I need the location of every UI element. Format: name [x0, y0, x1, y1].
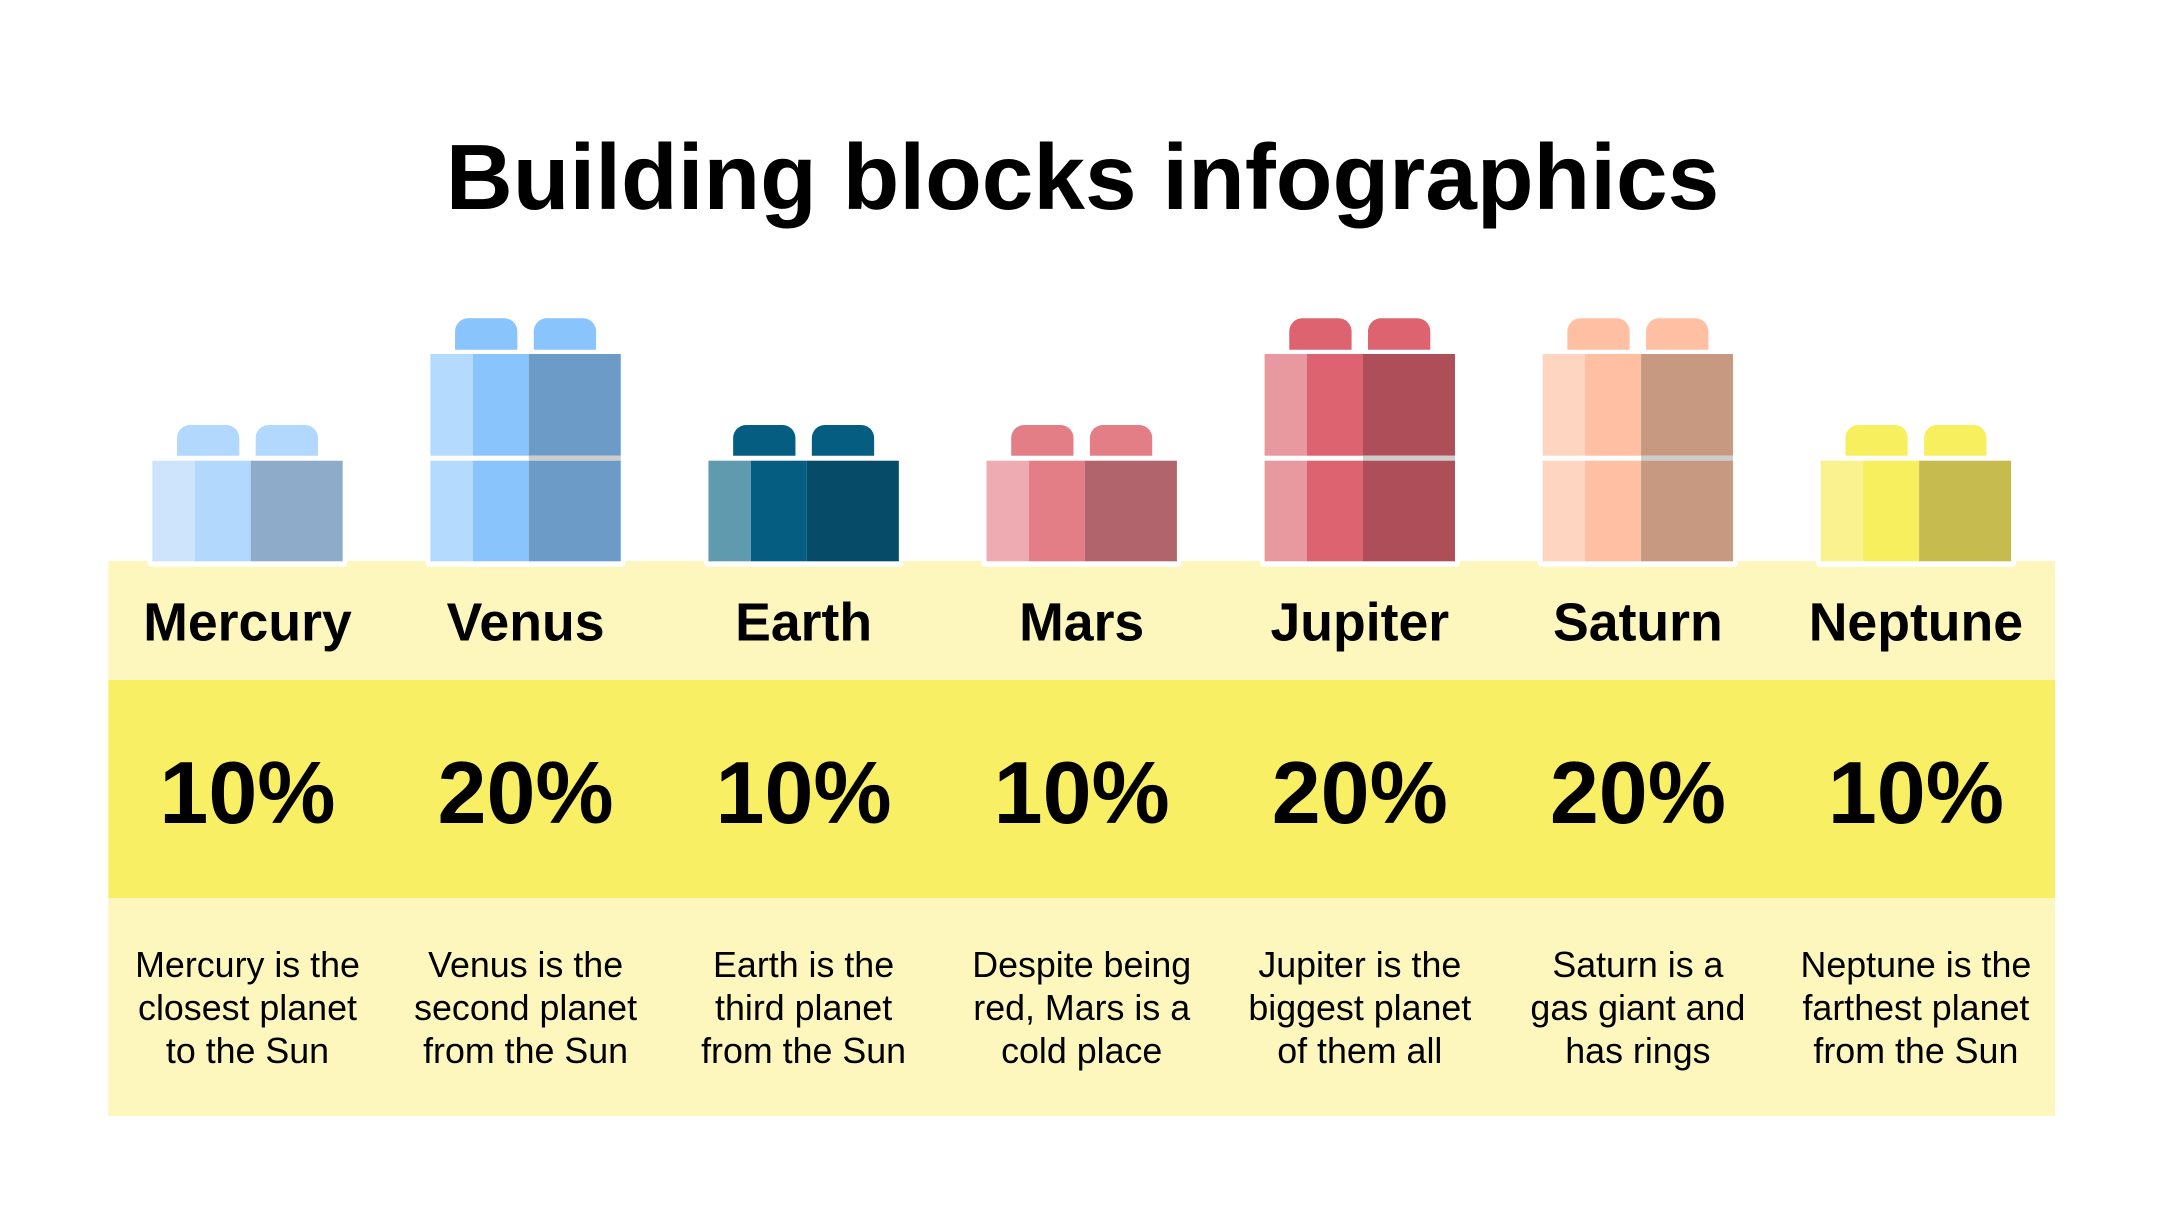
- text: Venus description: from the Sun: [423, 1031, 628, 1071]
- number: Earth 10%: 10%: [716, 743, 892, 842]
- icon: Venus block, two levels: [426, 318, 625, 567]
- text: Neptune description: Neptune is the: [1800, 945, 2031, 985]
- text: Neptune description: from the Sun: [1813, 1031, 2018, 1071]
- text: Venus description: second planet: [414, 988, 637, 1028]
- number: Mercury 10%: 10%: [159, 743, 336, 842]
- text: Saturn description: has rings: [1565, 1031, 1711, 1071]
- text: Jupiter description: of them all: [1277, 1031, 1442, 1071]
- text: Saturn description: gas giant and: [1530, 988, 1745, 1028]
- heading: Mercury: Mercury: [143, 593, 352, 653]
- text: Earth description: Earth is the: [713, 945, 894, 985]
- descriptions: [135, 945, 2031, 1071]
- icon: Mars block, one level: [982, 425, 1182, 567]
- number: Venus 20%: 20%: [438, 743, 614, 842]
- icon: Earth block, one level: [704, 425, 904, 567]
- text: Saturn description: Saturn is a: [1552, 945, 1724, 985]
- icon: Saturn block, two levels: [1538, 318, 1738, 567]
- icon: Neptune block, one level: [1816, 425, 2016, 567]
- text: Mercury description: to the Sun: [166, 1031, 329, 1071]
- planet names: [143, 593, 2023, 653]
- panel: descriptions band: [108, 898, 2055, 1116]
- title: Building blocks infographics: [446, 125, 1719, 229]
- text: Earth description: third planet: [715, 988, 892, 1028]
- heading: Mars: Mars: [1019, 593, 1144, 653]
- panel: names band: [108, 561, 2055, 680]
- heading: Venus: Venus: [447, 593, 605, 653]
- text: Mars description: cold place: [1001, 1031, 1162, 1071]
- text: Neptune description: farthest planet: [1802, 988, 2029, 1028]
- text: Jupiter description: Jupiter is the: [1258, 945, 1461, 985]
- number: Jupiter 20%: 20%: [1272, 743, 1448, 842]
- heading: Earth: Earth: [735, 593, 872, 653]
- panel: percentages band: [108, 680, 2055, 898]
- heading: Saturn: Saturn: [1553, 593, 1723, 653]
- number: Mars 10%: 10%: [994, 743, 1170, 842]
- text: Jupiter description: biggest planet: [1248, 988, 1471, 1028]
- icon: Jupiter block, two levels: [1260, 318, 1460, 567]
- percentages: [159, 743, 2004, 842]
- heading: Neptune: Neptune: [1809, 593, 2023, 653]
- text: Mars description: red, Mars is a: [973, 988, 1190, 1028]
- text: Earth description: from the Sun: [701, 1031, 906, 1071]
- text: Mercury description: Mercury is the: [135, 945, 360, 985]
- text: Venus description: Venus is the: [428, 945, 623, 985]
- number: Saturn 20%: 20%: [1550, 743, 1726, 842]
- heading: Jupiter: Jupiter: [1270, 593, 1449, 653]
- text: Mercury description: closest planet: [138, 988, 357, 1028]
- text: Mars description: Despite being: [972, 945, 1191, 985]
- number: Neptune 10%: 10%: [1828, 743, 2004, 842]
- icon: Mercury block, one level: [148, 425, 347, 567]
